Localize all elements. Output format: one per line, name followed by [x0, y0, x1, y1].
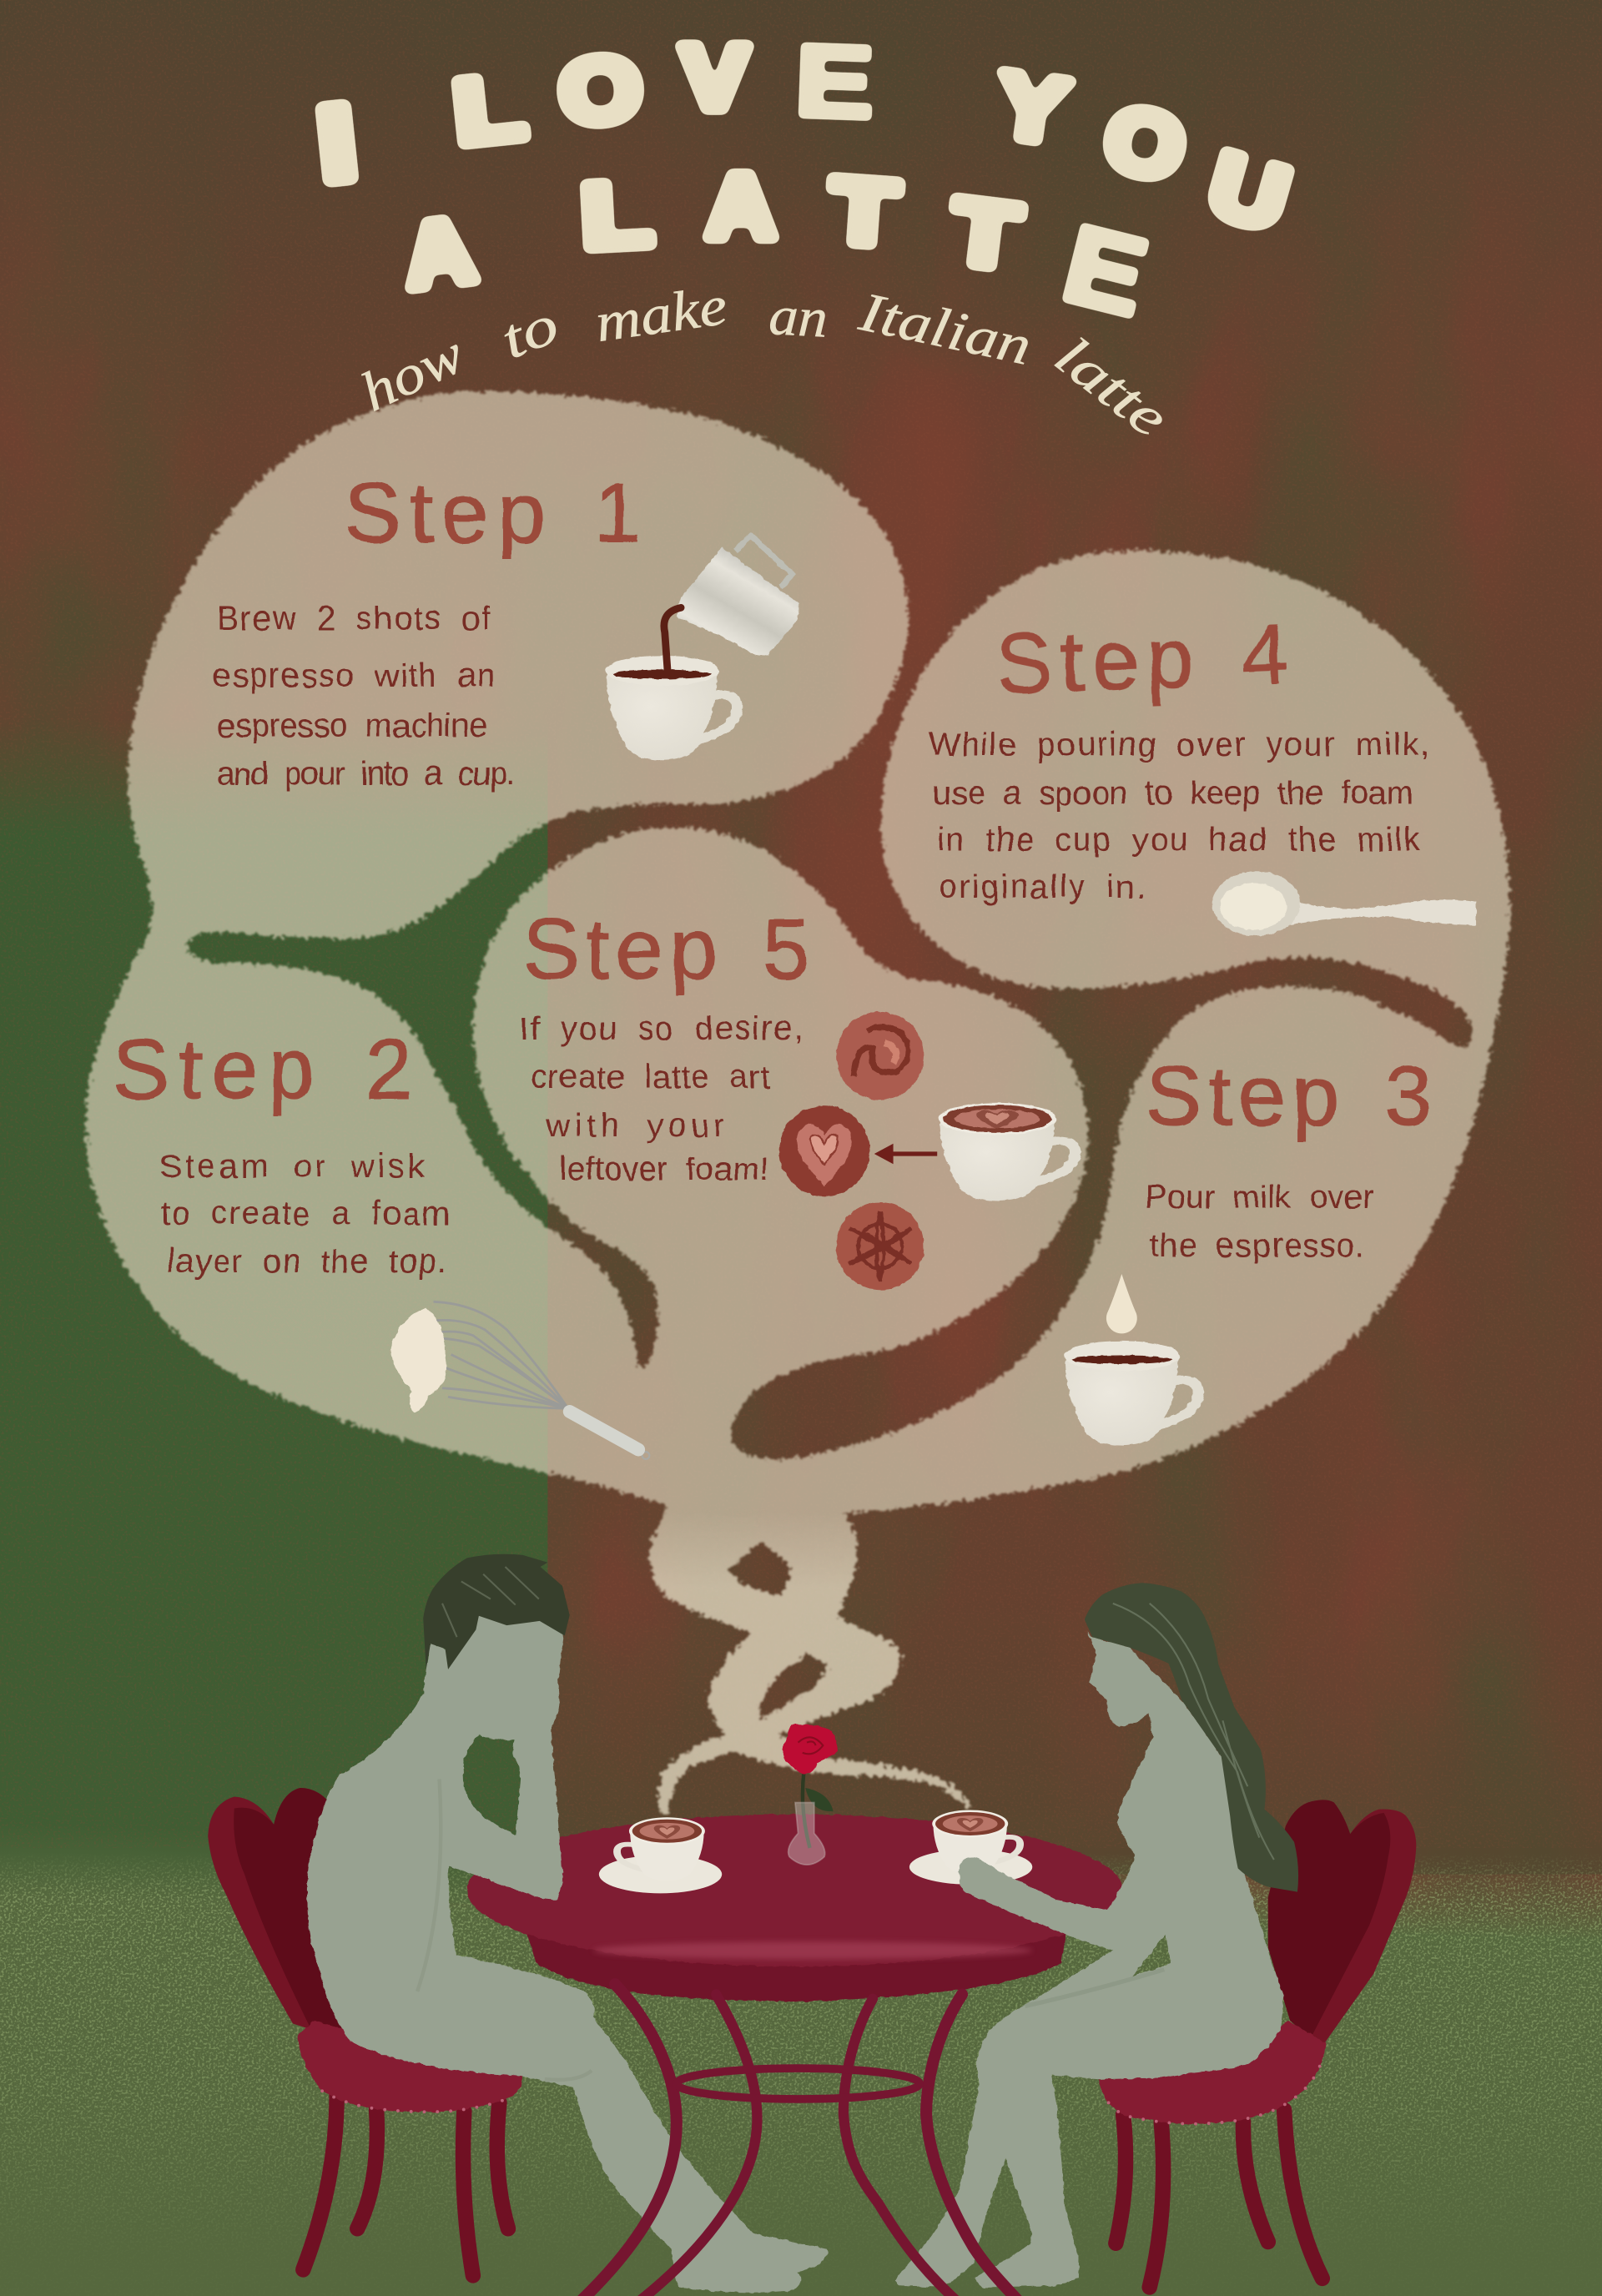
arrow	[874, 1144, 937, 1164]
man hair	[423, 1554, 570, 1669]
text: step 3 instructions	[1145, 1179, 1373, 1264]
left coffee cup on saucer	[599, 1817, 722, 1893]
icon: milk pitcher	[677, 536, 798, 656]
icon: latte cup	[938, 1103, 1075, 1201]
icon: cup	[1064, 1341, 1198, 1446]
subtitle: how to make an Italian latte: an	[768, 285, 829, 350]
panel: step 5	[520, 901, 1075, 1290]
title: I love you a latte	[313, 23, 1299, 339]
icon: espresso cup	[605, 656, 737, 760]
text: step 1 instructions: espresso with an	[212, 657, 495, 694]
icon: whisk with foam	[391, 1302, 649, 1459]
woman shading	[1025, 1970, 1164, 2006]
title: I love you a latte: V	[682, 27, 748, 128]
title: I love you a latte: L	[450, 56, 529, 164]
title: I love you a latte: Y	[990, 53, 1074, 163]
icon: latte art swan	[836, 1012, 924, 1100]
text: step 4 instructions: in the cup you had the milk	[937, 822, 1421, 858]
steam highlight over the twisted column	[650, 1505, 972, 1813]
subtitle: how to make an Italian latte: Italian	[854, 281, 1036, 377]
subtitle: how to make an Italian latte: to	[492, 294, 567, 371]
text: step 5 instructions	[520, 1010, 803, 1188]
text: step 2 instructions: to create a foam	[161, 1195, 450, 1231]
chair seat	[297, 2021, 523, 2112]
title: I love you a latte: I	[313, 83, 360, 203]
title: I love you a latte: A	[399, 198, 480, 307]
subtitle: how to make an Italian latte: make	[592, 275, 731, 354]
icon: milk drop	[1106, 1274, 1137, 1333]
text: step 3 instructions: Pour milk over	[1145, 1179, 1373, 1216]
icon: latte art heart	[779, 1105, 869, 1196]
icon: spoon	[1212, 871, 1476, 936]
title: I love you a latte: E	[1053, 201, 1158, 339]
icon: coffee stream	[664, 607, 681, 673]
text: step 1 instructions: and pour into a cup.	[217, 756, 516, 793]
subtitle: how to make an Italian latte: how	[352, 324, 473, 423]
text: step 3 instructions: the espresso.	[1150, 1227, 1365, 1264]
man body	[307, 1596, 828, 2293]
left chair	[208, 1788, 523, 2275]
panel: step 4	[929, 607, 1476, 936]
text: step 4 instructions: originally in.	[939, 869, 1145, 905]
subtitle: how to make an Italian latte: latte	[1044, 325, 1179, 450]
chair back	[1268, 1800, 1416, 2044]
title: I love you a latte: U	[1199, 132, 1299, 250]
title: I love you a latte: O	[557, 37, 644, 144]
text: step 1 instructions	[212, 601, 516, 793]
text: step 5 instructions: create latte art	[530, 1059, 768, 1095]
panel: step 2	[113, 1021, 649, 1459]
icon: latte art flower	[836, 1202, 924, 1290]
text: step 1 instructions: Brew 2 shots of	[217, 601, 491, 637]
title: I love you a latte: T	[827, 159, 900, 265]
heading: step 4: Step 4	[995, 607, 1290, 712]
title: I love you a latte: L	[579, 164, 654, 268]
right chair	[1098, 1800, 1416, 2287]
woman body	[894, 1631, 1283, 2287]
woman hair	[1085, 1583, 1298, 1892]
text: step 2 instructions	[159, 1148, 450, 1280]
text: step 5 instructions: leftover foam!	[559, 1151, 768, 1188]
man shading	[417, 1779, 592, 2080]
title: I love you a latte: T	[946, 179, 1025, 289]
text: step 4 instructions: use a spoon to keep the foam	[933, 775, 1413, 812]
rose in a glass vase	[782, 1725, 837, 1865]
title: I love you a latte: E	[793, 23, 876, 139]
text: step 5 instructions: with your	[546, 1107, 725, 1144]
chair legs	[1116, 2110, 1322, 2287]
text: step 2 instructions: Steam or wisk	[159, 1148, 425, 1185]
panel: step 3	[1064, 1048, 1432, 1446]
title: I love you a latte: O	[1096, 85, 1193, 201]
steam cloud holding the five steps, with rising twisted steam	[86, 391, 1509, 1813]
table top	[467, 1815, 1123, 2001]
text: step 1 instructions: espresso machine	[217, 707, 487, 744]
title: I love you a latte: A	[707, 155, 775, 257]
text: step 4 instructions	[929, 727, 1429, 905]
heading: step 1: Step 1	[344, 465, 642, 560]
chair back	[208, 1788, 351, 2042]
text: step 2 instructions: layer on the top.	[167, 1243, 446, 1280]
subtitle: how to make an Italian latte	[352, 275, 1179, 450]
bistro table legs and ring	[580, 1984, 1019, 2296]
heading: step 3: Step 3	[1145, 1048, 1432, 1143]
woman reaching for her cup	[894, 1583, 1298, 2287]
right coffee cup on saucer	[909, 1810, 1032, 1885]
text: step 4 instructions: While pouring over your milk,	[929, 727, 1429, 763]
chair legs	[303, 2094, 508, 2275]
man leaning on the table	[307, 1554, 828, 2293]
text: step 5 instructions: If you so desire,	[520, 1010, 803, 1047]
chair seat	[1098, 2021, 1325, 2124]
panel: step 1	[212, 465, 798, 793]
heading: step 5: Step 5	[523, 901, 810, 996]
heading: step 2: Step 2	[113, 1021, 413, 1116]
